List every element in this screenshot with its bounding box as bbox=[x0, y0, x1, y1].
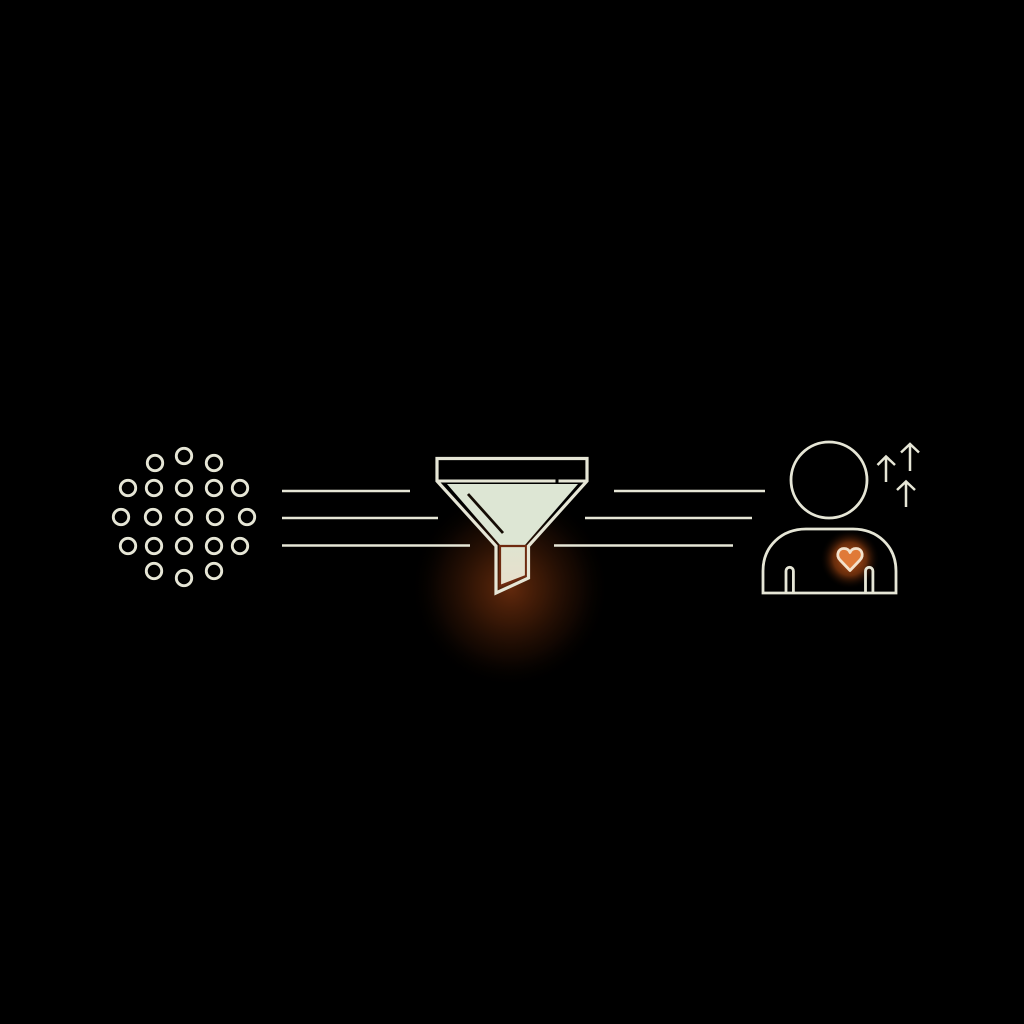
heart glow bbox=[820, 529, 880, 589]
icon: upward arrows bbox=[878, 444, 919, 507]
funnel rim line bbox=[437, 480, 587, 482]
rim notch bbox=[556, 478, 558, 484]
left arm slot bbox=[786, 567, 793, 593]
funnel outline bbox=[437, 458, 587, 593]
body bbox=[763, 529, 896, 593]
input lines bbox=[282, 491, 470, 546]
glow beneath funnel bbox=[410, 488, 610, 688]
funnel cone fill bbox=[447, 484, 578, 545]
icon: funnel bbox=[437, 458, 587, 593]
icon: cloud of input dots bbox=[113, 448, 255, 586]
funnel spout inner outline bbox=[500, 546, 526, 586]
head bbox=[791, 442, 867, 518]
output lines bbox=[554, 491, 765, 546]
right arm slot bbox=[866, 567, 873, 593]
highlight stroke bbox=[468, 494, 503, 533]
funnel spout fill bbox=[500, 546, 526, 586]
icon: person bbox=[763, 442, 896, 593]
icon: heart bbox=[838, 548, 862, 570]
